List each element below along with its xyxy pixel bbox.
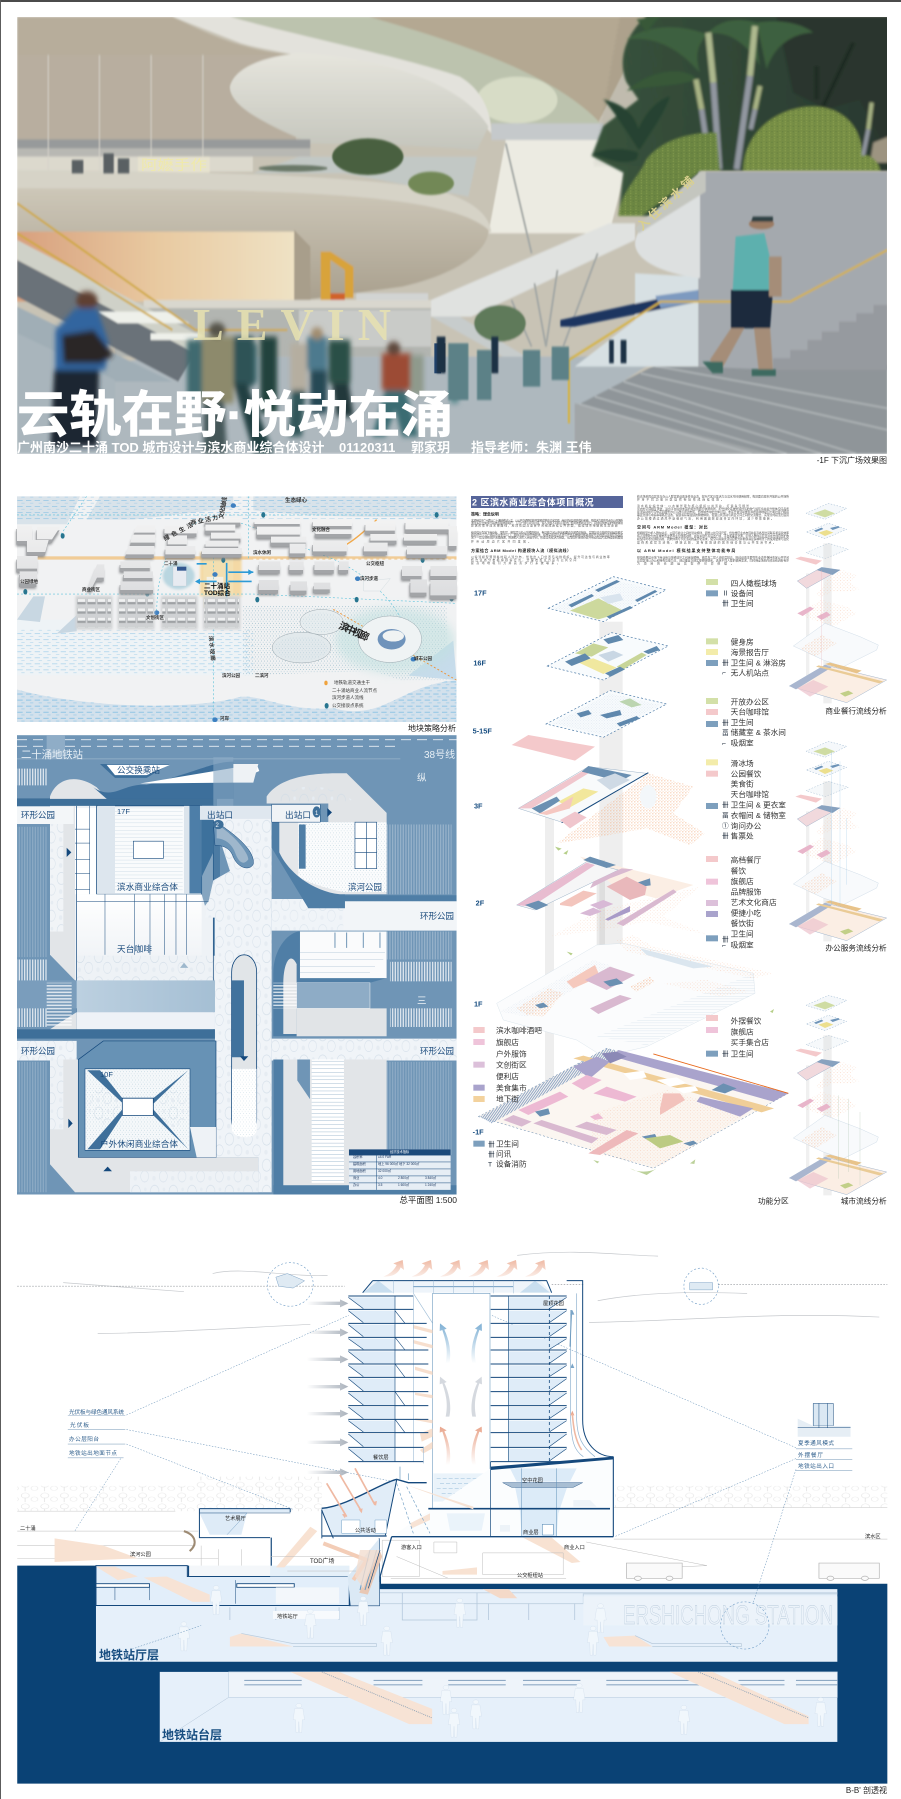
legend: 5-15F: 开放办公区 (731, 696, 769, 706)
small axon: urban flow (789, 995, 887, 1195)
legend: 17F: 卫生间 (731, 598, 754, 608)
section labels left: 地铁站出地面节点 (69, 1449, 117, 1457)
legend: 1F left: 滨水咖啡酒吧 (496, 1025, 542, 1035)
legend icons: 卌 (488, 1151, 495, 1159)
plan labels: 公交换乘站 (117, 764, 160, 775)
section: buses (626, 1563, 879, 1580)
map label: TOD: TOD综合 (204, 588, 231, 597)
legend: 17F: 四人橄榄球场 (731, 578, 777, 588)
small axon: office flow (789, 741, 887, 941)
legend: 3F: 卫生间 & 更衣室 (731, 799, 786, 809)
map labels: 滨河步道人流线 (332, 694, 364, 701)
roof ventilation arrows (383, 1260, 546, 1277)
floor labels: 3F (474, 802, 483, 811)
legend icons: 卌 (722, 600, 729, 608)
text block: right column: 根据模型分析人群在站点、公园与商业之间的流动规律，调整公共空间尺度，优化楼层业态布局并提高各部分间联系和运营效率 (637, 531, 789, 535)
map labels: 商业街区 (82, 586, 100, 593)
map: TOD tower (163, 563, 195, 589)
map label: TOD node: 二十涌站 (204, 581, 230, 590)
text block: right column: 高层区域以办公和特色功能为主，通过垂直交通实现便捷联系，满足不同人群的使用需求，同时保证场地内部流线清晰有序 (637, 558, 789, 562)
panel: project overview text (471, 495, 789, 565)
legend icons: 畐 (722, 729, 729, 737)
legend: 16F: 无人机站点 (731, 667, 769, 677)
plan labels: 三 (417, 996, 427, 1007)
section small labels: 屋顶花园 (543, 1299, 564, 1307)
plan labels: 38号线 (424, 748, 455, 761)
legend icons: 卌 (722, 935, 729, 943)
map labels: 绿色生活 (162, 521, 194, 543)
legend icons: Ⅱ (722, 591, 729, 598)
text block: right column: 以 ARM Model 模拟结果支持整体功能布局 (637, 547, 735, 553)
panel: exploded axonometric functional zoning (478, 577, 788, 1175)
map labels: 河岸 (220, 715, 229, 722)
legend icons: 卌 (488, 1141, 495, 1149)
subtitle: 郭家玥 (411, 440, 450, 455)
legend: -1F: 卫生间 (496, 1139, 519, 1149)
section labels left: 光伏板 (70, 1421, 89, 1429)
plan labels: 滨河公园 (348, 881, 382, 892)
map labels: 地铁轨道交通主干 (334, 679, 370, 686)
legend: -1F: 设备消防 (496, 1159, 527, 1169)
legend: 3F: 衣帽间 & 储物室 (731, 810, 786, 820)
section: leader lines (75, 1315, 796, 1649)
side wind arrows (307, 1299, 348, 1476)
section small labels: 滨河公园 (130, 1550, 151, 1558)
map labels: 文化轴线 (217, 496, 229, 519)
sign text: handmade shop: 阿嬷手作 (141, 157, 207, 173)
small axon: commercial flow (789, 503, 887, 703)
legend: 1F left: 美食集市 (496, 1082, 527, 1092)
text block: left column: 结合业态分布模拟顾客行为，合理布置主力店与公共空间 (471, 558, 577, 562)
legend: 2F: 旗舰店 (731, 876, 754, 886)
text block: left column: 并带动周边片区共同发展。 (471, 540, 531, 544)
plan labels: 2 (216, 823, 220, 829)
tower floor slabs (348, 1296, 567, 1462)
legend: 2F: 餐饮街 (731, 918, 754, 928)
floor labels: 5-15F (473, 726, 492, 735)
legend: 17F (706, 578, 777, 608)
section: concourse mezzanine (96, 1538, 379, 1605)
text block: left column: 方案结合 ARM Model 构建模块人流（模拟流线） (471, 547, 571, 553)
legend: 2F: 高档餐厅 (731, 855, 762, 865)
heading: station platform level: 地铁站台层 (162, 1727, 222, 1742)
map: light wedge building (364, 579, 390, 591)
legends: floor labels and function keys (473, 578, 887, 1205)
photo: palm trees and hedges (592, 16, 890, 216)
atrium (433, 1293, 490, 1536)
legend icons: ⌐ (722, 942, 726, 949)
panel: site strategy map (16, 496, 457, 733)
tower floors fill (348, 1297, 567, 1461)
legend icons: 卌 (722, 719, 729, 727)
photo: person on the stairs (72, 138, 782, 400)
axon: 17F (548, 577, 666, 622)
roof (363, 1281, 552, 1293)
legend: 5-15F: 天台咖啡馆 (731, 707, 769, 717)
plan labels: 环形公园 (420, 911, 454, 921)
section labels left: 办公层阳台 (69, 1435, 99, 1443)
map labels: 文创街区 (146, 614, 164, 621)
subtitle: 01120311 (339, 440, 395, 455)
text block: left column: 综合体分为地下商业街、零售层、餐饮层与办公塔楼四部分，各功能之间以中庭和垂直交通紧密衔接，实现复合高效的空间运营模式 (471, 530, 623, 534)
legend: 2F: 品牌服饰 (731, 886, 762, 896)
photo: crowd (50, 291, 459, 453)
section small labels: 公交枢纽站 (517, 1571, 543, 1579)
plan technical table: 办公 (353, 1182, 360, 1187)
legend: 16F: 健身房 (731, 636, 754, 646)
map labels: 二十涌站商业人流节点 (332, 687, 377, 694)
legend icons: 卌 (722, 801, 729, 809)
section: background trees and ground (17, 1252, 887, 1558)
legend icons: ⌐ (722, 670, 726, 677)
plan labels: 户外休闲商业综合体 (100, 1138, 178, 1149)
legend icons: 卌 (722, 659, 729, 667)
map labels: 公交接驳点系统 (332, 702, 364, 709)
map labels: 文化融合 (312, 526, 330, 533)
section small labels: 公共活动 (355, 1526, 376, 1534)
text block: right column: 模型同时考虑通勤高峰、周末休闲与节庆活动的差异化需求，使空间具备灵活适应能力并能够满足多种场景下的使用要求与变化 (637, 537, 789, 541)
subtitle: 广州南沙二十涌 TOD 城市设计与滨水商业综合体设计 (17, 440, 324, 455)
captions: 城市流线分析 (841, 1195, 887, 1205)
map labels: 商业活力 (190, 513, 219, 527)
map labels: 滨水休闲 (253, 549, 271, 556)
map labels: 二十涌 (164, 560, 178, 567)
plan labels: 环形公园 (420, 1046, 454, 1056)
section: mound and ground escalators (55, 1527, 580, 1595)
photo: hedge texture (618, 107, 880, 216)
legend: 2F: 餐饮 (731, 865, 746, 875)
text block: left column: 本项目位于广州南沙二十涌地铁站上盖，以公共交通导向的开发模式整合滨水景观、商业空间与城市慢行系统，形成活力城市节点与公共场所 (471, 518, 623, 522)
plan labels: 1 (315, 811, 319, 817)
section: cloud sketches (276, 1274, 713, 1290)
legend: 3F: 询问办公 (731, 820, 762, 830)
section small labels: 空中花园 (522, 1476, 543, 1484)
photo: right wall and stairs (560, 172, 887, 423)
heading: project overview (471, 496, 623, 508)
legend: 1F left: 户外服饰 (496, 1048, 527, 1058)
section small labels: 二十涌 (20, 1524, 36, 1532)
section: station platform (160, 1672, 837, 1742)
caption: section: B-B' 剖透视 (846, 1785, 887, 1795)
text block: left column: 通过多层立体步行系统连接地铁站厅、下沉广场与滨河公园，使人流在不同标高自然汇聚并激发商业活力，同时提供丰富的休闲体验 (471, 521, 623, 525)
plan technical table: 4.0 (378, 1176, 383, 1180)
legend: 5-15F: 吸烟室 (731, 737, 754, 747)
captions: 商业餐行流线分析 (825, 705, 887, 715)
legend: 1F left: 文创街区 (496, 1060, 527, 1070)
legend: 1F left (473, 1025, 542, 1104)
legend: 3F: 滑冰场 (731, 758, 754, 768)
legend: 2F: 艺术文化商店 (731, 897, 777, 907)
section: ground level details (201, 1540, 707, 1578)
sign text: waterfront entry: 入住滨水铺 (634, 173, 697, 233)
axon: 5-15F (546, 691, 667, 737)
plan labels: 滨水商业综合体 (117, 881, 178, 892)
floor labels: 1F (474, 999, 483, 1008)
section small labels: 游客入口 (401, 1543, 422, 1551)
legend: 5-15F: 储藏室 & 茶水间 (731, 727, 786, 737)
legend: 1F right: 旗舰店 (731, 1026, 754, 1036)
legend: 1F left: 便利店 (496, 1071, 519, 1081)
plan labels: 天台咖啡 (117, 943, 152, 954)
section: dashed detail circles (267, 1263, 769, 1649)
plan labels: 环形公园 (21, 1046, 55, 1056)
map labels: 生态绿心 (285, 496, 308, 504)
text block: right column (637, 495, 789, 565)
axon: core shafts (545, 622, 623, 1087)
map labels (20, 496, 432, 722)
plan technical table: 1 600㎡ (398, 1182, 410, 1187)
legend icons: 卌 (722, 1050, 729, 1058)
legend: 1F right: 买手集合店 (731, 1037, 769, 1047)
floor labels: -1F (473, 1128, 484, 1137)
legend: 5-15F: 卫生间 (731, 717, 754, 727)
text block: right column: 最终形成层次清晰、便捷高效、富有体验感的城市综合体与公共生活节点。 (637, 540, 776, 544)
section small labels: 艺术展厅 (225, 1514, 246, 1522)
caption: hero: -1F 下沉广场效果图 (817, 455, 887, 465)
section: label underlines (68, 1416, 852, 1471)
legend: -1F: 问讯 (496, 1150, 512, 1159)
plan technical table: 3 840㎡ (425, 1175, 437, 1180)
legend: 3F: 公园餐饮 (731, 768, 762, 778)
axon: 2F (517, 857, 708, 937)
legend: 2F: 便捷小吃 (731, 908, 762, 918)
panel: hero rendering (17, 16, 890, 465)
text block: right column: 为项目的长期运营提供可靠依据。 (637, 561, 734, 565)
legend: 1F right: 外摆餐饮 (731, 1015, 762, 1025)
text block: right column: 将人流量较大的区域布置主要商业与休闲功能，并在关键节点设置广场、平台和垂直交通，引导人群向高层及滨水方向自然扩散 (637, 534, 789, 538)
plan technical table: 用地面积 (353, 1168, 367, 1173)
legend icons: 卌 (722, 832, 729, 840)
legend icons: ⌐ (722, 740, 726, 747)
section labels left (69, 1408, 124, 1457)
plan technical table: 3.5 (378, 1183, 383, 1187)
core stair strip (413, 1293, 433, 1463)
map labels: 滨河步道 (360, 575, 378, 582)
base slab and navy wall (380, 1537, 613, 1582)
text block: left column: 以客流模型预测各时段人流分布，优化出入口位置与动线组织，提升可达性与商业效率 (471, 555, 610, 559)
legend: 1F left: 地下街 (496, 1094, 519, 1104)
axon: 3F (518, 766, 705, 855)
left block of the section (199, 1509, 322, 1538)
section: navy underground (17, 1566, 887, 1784)
mall signage: LEVIN (193, 299, 391, 350)
section: tower and podium (307, 1260, 613, 1590)
section labels right: 夏季通风模式 (798, 1439, 834, 1447)
legend icons: 畐 (722, 812, 729, 820)
section small labels: 滨水区 (865, 1532, 881, 1540)
legend icons: ① (722, 822, 729, 830)
floor labels: 17F (474, 589, 487, 598)
plan labels (21, 748, 455, 1149)
text block: left column: 裙房结合下沉广场设置主要出入口，面向滨河方向开放视线，塔楼采用双层表皮与光伏系统降低能耗并提升室内舒适度和环境品质 (471, 533, 623, 537)
legend: 1F left: 旗舰店 (496, 1037, 519, 1047)
section small labels: 餐饮层 (373, 1453, 389, 1461)
text block: left column: 策略：理念说明 (471, 510, 499, 516)
section labels left: 光伏板与绿色通风系统 (69, 1408, 124, 1416)
legend: 2F: 卫生间 (731, 929, 754, 939)
tower structure (348, 1296, 567, 1462)
floor labels: 16F (473, 658, 486, 667)
plan technical table: 经济技术指标 (390, 1149, 410, 1154)
legend: 16F: 海景报告厅 (731, 647, 769, 657)
map: low-rise blocks (76, 596, 240, 629)
axon: rooftop cafe terrace (512, 735, 595, 761)
section small labels: 商业层 (523, 1528, 539, 1536)
axon: -1F (478, 1048, 788, 1175)
legend icons (488, 591, 729, 1169)
plan labels: 纵 (417, 773, 427, 784)
text block: left column: 建筑形体呼应水岸曲线，屋顶花园与退台空间组成连续公共界面，延续城市绿脉和生态走廊 (471, 524, 618, 528)
plan technical table: 建筑面积 (353, 1161, 367, 1166)
legend: 3F (706, 758, 786, 840)
plan labels: 17F (117, 807, 130, 816)
text block: right column: 滨水商业综合体：以水岸景观为核心组织公共活动，打造多元场景 (637, 504, 749, 508)
captions: 办公服务流线分析 (825, 943, 887, 953)
captions (758, 705, 887, 1205)
plan labels: 出站口 (285, 809, 311, 820)
map labels: 城市公园 (414, 655, 432, 662)
map labels: 公交枢纽 (366, 560, 384, 567)
panel: B-B section perspective (17, 1252, 887, 1795)
legend: -1F (473, 1139, 527, 1169)
text block: right column: 室内外空间相互渗透，退台平台提供丰富的观景界面与休憩场所，配合绿化系统塑造舒适的微气候环境并提升整体空间品质 (637, 507, 789, 511)
text block: left column (471, 510, 623, 565)
text block: right column: 垂直交通与中庭串联各层业态，使顾客获得连续的购物体验，促进公共活动与商业空间之间的交流融合，实现全时段活力运营 (637, 513, 789, 517)
section small labels (20, 1299, 881, 1620)
heading: project overview: 2 区滨水商业综合体项目概况 (472, 496, 594, 507)
text block: left column: 提高场地吸引力并完善步行系统联系。 (471, 561, 560, 565)
map: massing buildings (16, 518, 457, 629)
captions: 功能分区 (758, 1195, 789, 1205)
section small labels: TOD广场 (310, 1557, 335, 1565)
legend: 1F right (706, 1015, 769, 1058)
text block: right column: 并将不同功能分区自然衔接形成连续体验。 (637, 498, 724, 502)
legend: 3F: 美食街 (731, 779, 754, 789)
podium blocks (392, 1457, 613, 1537)
legend: 2F (706, 855, 777, 949)
panel: master plan (17, 735, 457, 1205)
right facade double skin (567, 1281, 613, 1457)
plan technical table: ≤4.0 FAR (378, 1155, 392, 1159)
plan technical table: 容积率 (353, 1154, 363, 1159)
map labels: 滨水视廊 (207, 635, 217, 662)
section: inset building (798, 1403, 851, 1437)
plan technical table: 商业 (353, 1175, 359, 1180)
text block: right column: 模拟结果显示地下商业街与地铁站厅之间连接顺畅，首层及二层人流密度较高，因此设置主要零售业态并保持充足公共空间 (637, 555, 789, 559)
plan technical table: 1 240㎡ (425, 1182, 437, 1187)
section small labels: 地铁站厅 (277, 1612, 298, 1620)
floor labels (473, 589, 492, 1137)
legend: 5-15F (706, 696, 786, 747)
plan technical table (353, 1149, 437, 1187)
map labels: 滨河公园 (222, 672, 240, 679)
section labels right: 地铁站出入口 (798, 1462, 834, 1470)
text block: right column: 办公塔楼通过通风中庭组织气流，利用烟囱效应改善室内环境，减少整体能耗。 (637, 516, 774, 520)
canopy (322, 1467, 430, 1538)
plan technical table: 32 000㎡ (378, 1168, 392, 1173)
text block: right column: 空间与 ARM Model 模型：对比 (637, 523, 708, 529)
text block: right column: 结合场地周边居住与办公人群需求设置多样化业态，提升片区日常活力与滨水空间使用频率，构建面向城市开放的公共场所 (637, 495, 789, 499)
legend: 2F: 吸烟室 (731, 939, 754, 949)
legend: 16F: 卫生间 & 淋浴房 (731, 657, 786, 667)
legend icons: T (488, 1162, 492, 1169)
plan technical table: 2 800㎡ (398, 1175, 410, 1180)
plan labels: 环形公园 (21, 810, 55, 820)
legend: 3F: 天台咖啡馆 (731, 789, 769, 799)
caption: site strategy: 地块策略分析 (408, 723, 456, 733)
caption: master plan: 总平面图 1:500 (399, 1195, 457, 1205)
section small labels: 商业入口 (564, 1543, 585, 1551)
floor labels: 2F (476, 899, 485, 908)
plan labels: 二十涌地铁站 (21, 748, 84, 761)
axon: 16F (547, 633, 668, 680)
map label: sky corridor: 滨中视廊 (337, 619, 371, 644)
legend: 17F: 设备间 (731, 588, 754, 598)
plan labels: 10F (100, 1070, 113, 1079)
section: station hall (96, 1589, 837, 1662)
section: people (178, 1586, 826, 1737)
plan labels: 出站口 (207, 809, 233, 820)
map labels: 公园绿地 (20, 578, 38, 585)
text block: left column: 地下一层与地铁站厅无缝连通，将通勤人流引入商业空间，形成全天候活力街区，从而提升场地价值并带动周边片区持续更新发展 (471, 536, 623, 540)
legend: 3F: 售票处 (731, 830, 754, 840)
text block: right column: 屋顶运动场与空中花园服务办公人群与周边市民，形成城市中的立体公园，丰富日常活动类型并增强场地吸引力和社区归属感 (637, 510, 789, 514)
title: 云轨在野·悦动在涌 (17, 387, 453, 443)
subtitle: 指导老师：朱渊 王伟 (471, 440, 592, 455)
section labels right (798, 1439, 834, 1470)
map labels: 二滨河 (255, 672, 269, 679)
heading: station hall level: 地铁站厅层 (99, 1647, 159, 1662)
legend: 16F (706, 636, 786, 677)
legend: 1F right: 卫生间 (731, 1048, 754, 1058)
section labels right: 外摆餐厅 (798, 1451, 823, 1459)
axon: 1F (497, 935, 774, 1057)
plan technical table: 地上 96 000㎡ 地下 32 000㎡ (378, 1161, 420, 1166)
